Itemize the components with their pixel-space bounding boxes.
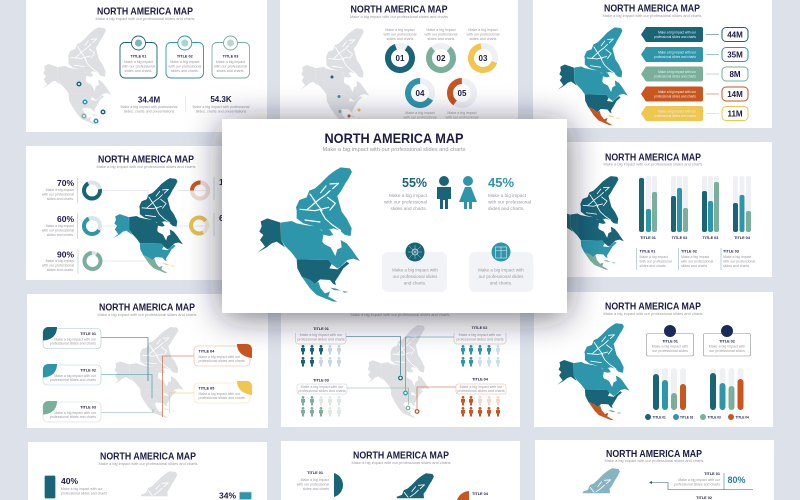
donut 04 <box>404 77 437 120</box>
card: title 02 <box>166 36 204 78</box>
note title 02: with our professional <box>681 260 713 264</box>
icon: gift box <box>492 242 510 262</box>
map <box>113 178 183 273</box>
card: title 03 <box>212 36 250 78</box>
heading: NORTH AMERICA MAP <box>100 452 196 462</box>
card right <box>469 242 534 292</box>
stat 90%: Make a big impact <box>46 259 74 263</box>
bars group 1: TITLE 01 <box>640 236 656 240</box>
note title 03: Make a big impact <box>723 255 751 259</box>
card title 05: professional slides and charts <box>198 396 245 400</box>
group title 03: TITLE 03 <box>313 378 329 382</box>
bars group 1 <box>653 368 686 410</box>
stat: 54.3K: slides, charts and presentations <box>196 110 246 114</box>
group title 03: professional slides and charts <box>298 389 346 393</box>
donut 03: with our professional <box>467 32 500 36</box>
row: 35M: 35M <box>727 50 743 60</box>
subheading: Make a big impact with our professional slides and charts <box>96 165 196 169</box>
group title 04: Make a big impact with our <box>460 385 503 389</box>
row: 35M: Make a big impact with our <box>658 50 697 54</box>
row: 14M: 14M <box>727 90 743 99</box>
bars group 1 <box>639 176 657 240</box>
phone icon 40%: Make a big impact with our <box>61 487 103 491</box>
heading: NORTH AMERICA MAP <box>98 154 194 166</box>
row: 14M: Make a big impact with our <box>658 90 697 94</box>
segment title 01: Make a big impact <box>301 478 329 482</box>
note title 01 <box>636 248 672 270</box>
card title 02 <box>704 325 750 356</box>
grey map <box>300 28 369 125</box>
card title 01: Make a big impact with <box>652 344 688 348</box>
connector lines <box>346 336 456 410</box>
note title 01: Make a big impact <box>640 255 668 259</box>
card title 05: Make a big impact with our <box>198 392 241 396</box>
card: title 03: with our professional <box>214 64 247 68</box>
card title 04 <box>194 344 252 366</box>
phone icon 40% <box>44 476 107 498</box>
card left: and charts. <box>404 280 426 286</box>
group title 02: TITLE 02 <box>472 326 487 330</box>
note title 02 <box>678 248 713 270</box>
grey map <box>367 325 430 418</box>
stat 55%: 55% <box>402 176 427 190</box>
phone icon 40%: 40% <box>61 476 78 486</box>
heading: NORTH AMERICA MAP <box>99 302 195 314</box>
subheading: Make a big impact with our professional slides and charts <box>350 15 448 19</box>
card title 02: TITLE 02 <box>80 368 96 372</box>
donut 02: 02 <box>437 54 446 63</box>
map pins <box>330 76 360 118</box>
right donut rust: 15% <box>219 177 236 187</box>
note title 03: TITLE 03 <box>723 250 739 254</box>
legend: TITLE 04 <box>736 416 749 420</box>
heading: NORTH AMERICA MAP <box>606 449 702 460</box>
legend: TITLE 03 <box>708 416 721 420</box>
donut 03 <box>467 28 500 73</box>
donut 01 <box>383 28 417 75</box>
group title 03: Make a big impact with our <box>301 385 344 389</box>
icon: woman <box>459 176 477 209</box>
stat 45%: Make a big impact <box>488 193 527 198</box>
stat 90%: 90% <box>57 250 74 260</box>
card: title 03: slides and charts. <box>217 69 244 73</box>
stat 70%: 70% <box>57 178 74 188</box>
callout 80%: professional slides and charts <box>674 482 720 486</box>
row: 8M <box>641 66 748 82</box>
segment title 01: with our professional <box>297 482 329 486</box>
card title 04: professional slides and charts <box>198 359 245 363</box>
stat: 34.4M: 34.4M <box>138 96 160 104</box>
group title 03 <box>297 378 347 416</box>
stat 60%: 60% <box>57 214 74 224</box>
subheading: Make a big impact with our professional slides and charts <box>96 17 195 21</box>
right donut yellow: 65% <box>219 213 236 223</box>
phone icon 40%: professional slides and charts <box>61 492 107 496</box>
card right: Make a big impact with <box>478 268 524 272</box>
donut 02: slides and charts <box>428 37 455 41</box>
donut 01: slides and charts <box>387 37 414 41</box>
stat 60%: Make a big impact <box>46 224 74 228</box>
card: title 03: TITLE 03 <box>223 54 238 58</box>
panel: slide with arrows and values <box>533 0 772 128</box>
group title 01: Make a big impact with our <box>300 333 343 337</box>
group title 04: professional slides and charts <box>457 389 505 393</box>
callout 80% <box>649 472 753 490</box>
note title 03 <box>721 248 755 270</box>
note title 01: TITLE 01 <box>640 250 655 254</box>
grey map <box>141 471 177 496</box>
stat: 54.3K: 54.3K <box>210 95 232 104</box>
row: 44M: 44M <box>727 30 743 40</box>
segment title 01: slides and charts <box>303 487 329 491</box>
donut 05: 05 <box>458 89 467 98</box>
stat 55%: slides and charts. <box>391 206 427 211</box>
card title 02: our professional slides <box>709 349 745 353</box>
coloured map <box>558 27 628 125</box>
donut 03: Make a big impact <box>468 28 498 32</box>
legend: TITLE 01 <box>652 416 666 420</box>
stat 45%: with our professional <box>488 200 531 204</box>
bars group 3: TITLE 03 <box>703 236 718 240</box>
card title 01: our professional slides <box>652 349 688 353</box>
card right: and charts. <box>490 280 512 286</box>
card title 03: professional slides and charts <box>50 415 96 419</box>
stat 70% <box>42 178 101 203</box>
bars group 4: TITLE 04 <box>734 236 751 240</box>
phone icon 34% <box>219 490 252 500</box>
segment title 01: TITLE 01 <box>307 471 323 475</box>
row: 8M: professional slides and charts <box>654 74 696 78</box>
card title 03: TITLE 03 <box>80 406 96 410</box>
card left <box>382 242 447 292</box>
panel: bottom-middle slide <box>281 441 520 500</box>
bars group 2: TITLE 02 <box>672 236 687 240</box>
stat 45%: slides and charts. <box>488 206 524 211</box>
note title 03: slides and charts <box>723 264 750 268</box>
card title 01: TITLE 01 <box>80 332 96 336</box>
card title 04: Make a big impact with our <box>198 355 241 359</box>
stat: 54.3K <box>193 95 250 114</box>
note title 02: TITLE 02 <box>681 250 697 254</box>
stat 45%: 45% <box>488 176 514 190</box>
stat: 34.4M: slides, charts and presentations <box>124 110 174 114</box>
card title 01: TITLE 01 <box>662 340 678 344</box>
stat 70%: Make a big impact <box>46 188 74 192</box>
bars group 3 <box>702 176 719 240</box>
donut 03: 03 <box>479 54 488 63</box>
subheading: Make a big impact with our professional slides and charts <box>350 313 450 317</box>
group title 01: professional slides and charts <box>297 338 345 342</box>
card title 03 <box>43 401 101 422</box>
subheading: Make a big impact with our professional slides and charts <box>352 461 451 465</box>
icon: man <box>437 176 451 209</box>
stat: 34.4M <box>121 96 178 114</box>
card: title 01: with our professional <box>122 64 155 68</box>
stat 60%: slides and charts. <box>47 233 74 237</box>
subheading: Make a big impact with our professional slides and charts <box>604 162 703 166</box>
card title 02 <box>43 364 101 385</box>
stat 70%: with our professional <box>42 192 74 196</box>
card: title 01: Make a big impact <box>124 60 153 64</box>
donut 05: with our professional <box>446 116 479 120</box>
map markers <box>77 82 105 123</box>
bars group 4 <box>733 176 751 240</box>
heading: NORTH AMERICA MAP <box>350 4 448 16</box>
stat 90% <box>42 249 103 274</box>
card title 03: Make a big impact with our <box>54 411 97 415</box>
row: 8M: 8M <box>729 70 741 79</box>
callout 80%: 80% <box>728 475 746 485</box>
panel: slide with numbered donuts <box>280 0 518 125</box>
row: 44M: Make a big impact with our <box>658 30 697 34</box>
card: title 01 <box>120 36 157 78</box>
card: title 02: slides and charts. <box>171 69 199 73</box>
subheading: Make a big impact with our professional slides and charts <box>322 147 466 153</box>
stat: 54.3K: Make a big impact with professional <box>193 105 250 109</box>
map <box>557 323 630 420</box>
callout 80%: Make a big impact with our <box>678 478 721 482</box>
grey map <box>113 327 184 418</box>
row: 14M: professional slides and charts <box>654 94 696 98</box>
card title 02: TITLE 02 <box>719 340 735 344</box>
legend <box>645 414 749 420</box>
heading: NORTH AMERICA MAP <box>604 4 700 14</box>
card title 01 <box>646 325 694 356</box>
card title 01: professional slides and charts <box>50 342 96 346</box>
grey map <box>42 27 111 124</box>
row: 11M: Make a big impact with our <box>658 110 697 114</box>
right donut yellow <box>188 213 236 236</box>
connector lines <box>103 190 210 261</box>
donut 01: with our professional <box>384 32 417 36</box>
group title 01: TITLE 01 <box>313 327 329 331</box>
card title 01: Make a big impact with our <box>54 338 97 342</box>
stat 55% <box>384 176 428 211</box>
card left: Make a big impact with <box>392 268 438 272</box>
row: 44M <box>641 27 748 42</box>
right donut rust <box>192 177 236 200</box>
map <box>554 176 624 270</box>
donut 02: with our professional <box>425 32 458 36</box>
row: 11M <box>641 106 748 121</box>
group title 02 <box>454 326 506 366</box>
donut 01: 01 <box>396 54 405 63</box>
card left: our professional slides <box>393 274 438 279</box>
panel: slide with percentage donuts <box>26 146 267 280</box>
bars group 2 <box>710 368 744 410</box>
panel: bottom-right slide <box>535 440 774 500</box>
note title 02: Make a big impact <box>681 255 709 259</box>
stat 55%: with our professional <box>384 200 427 204</box>
donut 04: 04 <box>416 89 425 98</box>
subheading: Make a big impact with our professional slides and charts <box>604 459 704 463</box>
stat 90%: with our professional <box>42 264 74 268</box>
donut 02 <box>424 28 458 75</box>
title 02: TITLE 02 <box>696 496 712 500</box>
donut 05: Make a big impact <box>447 111 477 115</box>
subheading: Make a big impact with our professional slides and charts <box>604 312 703 316</box>
map <box>397 473 434 498</box>
legend: TITLE 02 <box>680 416 694 420</box>
row: 8M: Make a big impact with our <box>658 70 697 74</box>
card: title 02: with our professional <box>168 64 201 68</box>
heading: NORTH AMERICA MAP <box>97 6 193 18</box>
callout 80%: TITLE 01 <box>704 472 720 476</box>
note title 03: with our professional <box>723 260 755 264</box>
segment title 01 <box>297 471 343 497</box>
donut 04: with our professional <box>404 116 437 120</box>
card title 05 <box>194 381 252 403</box>
stat 60%: with our professional <box>42 228 74 232</box>
heading: NORTH AMERICA MAP <box>324 130 464 146</box>
note title 01: slides and charts <box>640 264 666 268</box>
card title 01 <box>43 327 101 348</box>
panel: bottom-left slide <box>28 442 267 500</box>
donut 01: Make a big impact <box>385 28 415 32</box>
card title 04: TITLE 04 <box>198 350 215 354</box>
stat 70%: slides and charts. <box>47 197 74 201</box>
stat: 34.4M: Make a big impact with professional <box>121 105 178 109</box>
group title 02: professional slides and charts <box>456 338 504 342</box>
card: title 01: slides and charts. <box>125 69 152 73</box>
card title 05: TITLE 05 <box>198 386 214 390</box>
heading: NORTH AMERICA MAP <box>605 152 701 164</box>
row: 44M: professional slides and charts <box>654 35 696 39</box>
row: 14M <box>641 86 748 102</box>
card: title 02: TITLE 02 <box>177 54 193 58</box>
icon: network <box>406 242 424 262</box>
subheading: Make a big impact with our professional slides and charts <box>602 14 702 18</box>
panel: slide with callout cards <box>27 294 268 428</box>
panel: slide with people pictograms <box>281 300 520 427</box>
panel: slide with bar groups <box>533 142 772 277</box>
donut 03: slides and charts <box>470 37 497 41</box>
card: title 01: TITLE 01 <box>131 54 146 58</box>
card title 02: Make a big impact with our <box>54 374 97 378</box>
row: 11M: professional slides and charts <box>654 114 696 118</box>
segment title 04: TITLE 04 <box>472 492 489 496</box>
map <box>583 468 620 493</box>
stat 90%: slides and charts. <box>47 268 74 272</box>
group title 01 <box>296 327 346 366</box>
note title 02: slides and charts <box>681 264 708 268</box>
heading: NORTH AMERICA MAP <box>605 302 701 312</box>
group title 02: Make a big impact with our <box>459 333 502 337</box>
donut 02: Make a big impact <box>426 28 456 32</box>
heading: NORTH AMERICA MAP <box>353 450 449 462</box>
map <box>257 167 360 302</box>
connector lines <box>101 338 194 417</box>
subheading: Make a big impact with our professional slides and charts <box>98 313 197 317</box>
group title 04: TITLE 04 <box>472 378 489 382</box>
stat 55%: Make a big impact <box>389 193 428 198</box>
map pins <box>399 376 419 413</box>
row: 35M <box>641 47 748 62</box>
row: 11M: 11M <box>727 110 743 118</box>
donut 05 <box>445 76 479 120</box>
group title 04 <box>456 378 506 416</box>
subheading: Make a big impact with our professional slides and charts <box>98 462 198 466</box>
row: 35M: professional slides and charts <box>654 55 696 59</box>
stat 60% <box>42 213 103 239</box>
card: title 02: Make a big impact <box>170 60 199 64</box>
card title 02: professional slides and charts <box>50 378 96 382</box>
panel: central feature slide <box>222 119 567 313</box>
panel: slide with three title cards <box>26 0 267 132</box>
card title 02: Make a big impact with <box>709 344 745 348</box>
stat 45% <box>488 176 531 211</box>
bars group 2 <box>671 176 688 240</box>
panel: slide with cards and bars <box>534 292 773 427</box>
card right: our professional slides <box>479 274 524 279</box>
segment title 04 <box>457 491 489 500</box>
donut 04: Make a big impact <box>405 111 435 115</box>
note title 01: with our professional <box>640 260 672 264</box>
card: title 03: Make a big impact <box>216 60 245 64</box>
